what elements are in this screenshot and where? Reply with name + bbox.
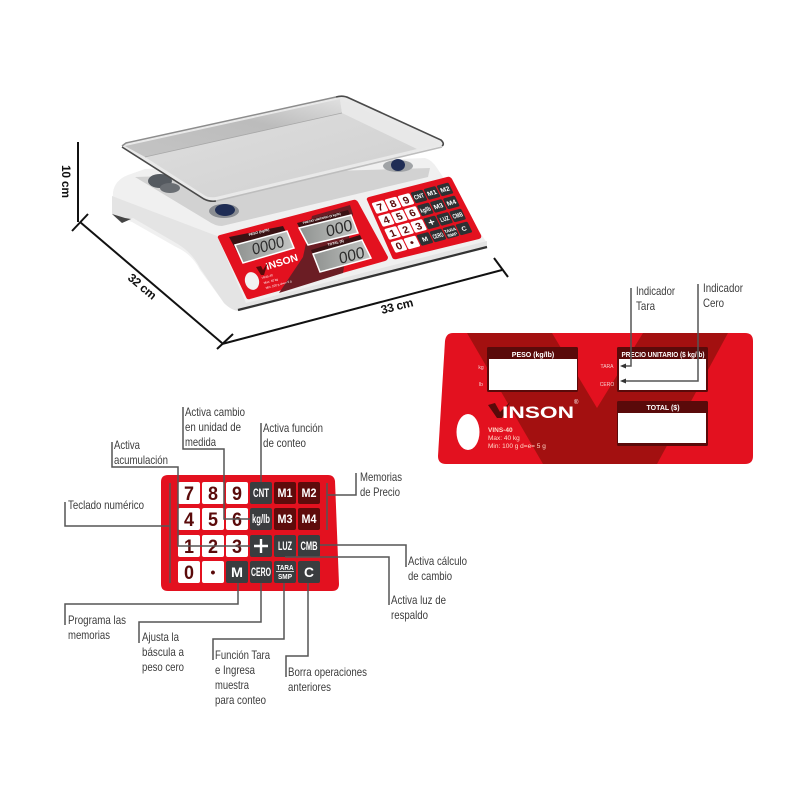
numeric keys: 1: [184, 537, 194, 558]
callout: indicador cero: [620, 281, 743, 384]
callout: ajusta a peso cero: peso cero: [142, 660, 184, 674]
Vinson logo: INSON: [502, 403, 574, 422]
Vinson logo: ®: [574, 399, 579, 406]
function keys: C: [304, 564, 314, 580]
window: total: TOTAL ($): [646, 405, 680, 412]
callout: ajusta a peso cero: [139, 583, 261, 674]
function keys: M: [231, 564, 243, 580]
callout: programa las memorias: [65, 583, 238, 642]
indicator labels: TARA: [601, 364, 614, 370]
dark V shape: [467, 333, 728, 464]
numeric keys: 7: [184, 484, 194, 505]
window: precio unitario: [617, 347, 708, 392]
callout: activa función de conteo: de conteo: [263, 436, 306, 450]
display panel on scale: 0000: [251, 233, 286, 259]
scale feet: [148, 159, 413, 218]
callout: memorias de precio: de Precio: [360, 485, 400, 499]
callout: teclado numérico: [65, 483, 170, 583]
window: precio unitario: PRECIO UNITARIO ($ kg/lb): [622, 352, 704, 359]
display panel on scale: TOTAL ($): [327, 239, 344, 247]
keypad on scale: M: [421, 236, 430, 244]
indicator labels: [478, 364, 614, 388]
keypad on scale: CNT: [413, 193, 426, 202]
callout: activa acumulación: [112, 438, 250, 546]
numeric keys: 6: [232, 510, 242, 531]
keypad on scale: CERO: [432, 232, 445, 241]
illustration: scale with dimensions: [59, 96, 508, 349]
callout: programa las memorias: Programa las: [68, 613, 126, 627]
memory keys: M3: [278, 512, 293, 526]
function keys: kg/lb: [252, 512, 270, 526]
keypad on scale: [367, 177, 481, 259]
keypad on scale: 6: [407, 207, 418, 220]
numeric keys: 5: [208, 510, 218, 531]
callout: borra operaciones: [286, 583, 367, 694]
window: peso: PESO (kg/lb): [512, 352, 554, 359]
callout: programa las memorias: memorias: [68, 628, 110, 642]
function keys: CERO: [251, 565, 271, 579]
numeric keys: 2: [208, 537, 218, 558]
keypad on scale: 9: [401, 195, 412, 207]
callout: memorias de precio: Memorias: [360, 470, 402, 484]
model specifications: Max: 40 kg: [488, 435, 520, 442]
display panel on scale: [218, 200, 388, 299]
numeric keys: 3: [232, 537, 242, 558]
panel: display faceplate: [438, 333, 753, 464]
keypad on scale: 5: [394, 211, 405, 223]
callout: activa cálculo de cambio: Activa cálculo: [408, 554, 467, 568]
callout: activa acumulación: Activa: [114, 438, 140, 452]
Vinson logo: [488, 399, 579, 422]
keypad on scale: SMP: [447, 231, 458, 238]
callout: activa cambio de unidad: Activa cambio: [185, 405, 245, 419]
function keys: TARA: [276, 565, 294, 572]
callout: borra operaciones: Borra operaciones: [288, 665, 367, 679]
function keys: [226, 482, 320, 583]
callout: activa acumulación: acumulación: [114, 453, 168, 467]
numeric keys: •: [211, 564, 216, 580]
dimension: 32 cm: 32 cm: [125, 271, 159, 303]
callout: ajusta a peso cero: báscula a: [142, 645, 184, 659]
model specifications: Min: 100 g d=e= 5 g: [488, 443, 546, 450]
dimension: 33 cm: 33 cm: [379, 295, 415, 317]
keypad on scale: TARA: [443, 226, 458, 234]
keypad on scale: 3: [414, 221, 425, 233]
keypad on scale: +: [426, 217, 437, 229]
keypad on scale: CMB: [452, 212, 464, 220]
keypad on scale: 8: [388, 198, 399, 210]
display panel on scale: Min: 100 g d=e= 5 g: [265, 279, 292, 290]
callout: activa cálculo de cambio: de cambio: [408, 569, 452, 583]
scale body: [112, 158, 487, 311]
function keys: CNT: [253, 486, 269, 500]
display panel on scale: VINS-40: [261, 273, 274, 280]
callout: activa función de conteo: Activa función: [263, 421, 323, 435]
display panel on scale: PESO (kg/lb): [248, 228, 270, 237]
callout: teclado numérico: Teclado numérico: [68, 498, 144, 512]
keypad on scale: 4: [381, 214, 392, 227]
dimension lines: [72, 142, 508, 349]
keypad on scale: kg/lb: [419, 206, 432, 215]
memory keys: M4: [302, 512, 317, 526]
callout: memorias de precio: [327, 470, 402, 530]
faceplate background: [438, 333, 753, 464]
panel: keypad: [161, 475, 339, 591]
indicator labels: CERO: [600, 382, 614, 388]
keypad on scale: 7: [375, 202, 386, 214]
memory keys: [274, 482, 320, 530]
numeric keys: [178, 482, 248, 584]
function keys: LUZ: [278, 539, 292, 553]
callout: activa luz de respaldo: respaldo: [391, 608, 428, 622]
callout: indicador tara: Tara: [636, 299, 655, 313]
window: total: [617, 401, 708, 446]
display panel on scale: 000: [325, 216, 354, 241]
callout: función tara: e Ingresa: [215, 663, 255, 677]
numeric keys: 9: [232, 484, 242, 505]
level window oval: [456, 414, 480, 450]
keypad on scale: •: [408, 237, 417, 249]
indicator labels: kg: [478, 365, 484, 371]
keypad on scale: 1: [388, 228, 399, 240]
callout: borra operaciones: anteriores: [288, 680, 331, 694]
callout: función tara: [213, 583, 284, 707]
dimension: 10 cm: 10 cm: [59, 165, 73, 198]
callout: indicador cero: Cero: [703, 296, 724, 310]
callout: función tara: muestra: [215, 678, 249, 692]
callout: activa cambio de unidad: medida: [185, 435, 216, 449]
keypad on scale: 0: [394, 240, 405, 253]
window: peso: [487, 347, 578, 392]
callout: activa cambio de unidad: [183, 405, 250, 519]
keypad on scale: 2: [401, 224, 412, 236]
keypad on scale: M3: [433, 202, 445, 211]
callout: indicador tara: Indicador: [636, 284, 675, 298]
model specifications: VINS-40: [488, 427, 513, 434]
callout: ajusta a peso cero: Ajusta la: [142, 630, 179, 644]
memory keys: M2: [302, 486, 317, 500]
callout: indicador cero: Indicador: [703, 281, 743, 295]
callout: función tara: Función Tara: [215, 648, 270, 662]
weighing tray: [122, 96, 443, 201]
keypad on scale: C: [461, 226, 468, 233]
callout: activa cambio de unidad: en unidad de: [185, 420, 241, 434]
keypad on scale: M2: [439, 186, 452, 194]
keypad on scale: M4: [446, 199, 458, 208]
callout: activa cálculo de cambio: [320, 545, 467, 583]
callout: activa función de conteo: [261, 421, 323, 482]
numeric keys: 8: [208, 484, 218, 505]
model specifications: [488, 427, 546, 450]
memory keys: M1: [278, 486, 293, 500]
keypad background: [161, 475, 339, 591]
numeric keys: 4: [184, 510, 194, 531]
callout: activa luz de respaldo: [285, 557, 446, 622]
numeric keys: 0: [184, 563, 194, 584]
callout: función tara: para conteo: [215, 693, 266, 707]
callout: activa luz de respaldo: Activa luz de: [391, 593, 446, 607]
indicator labels: lb: [479, 382, 483, 388]
keypad on scale: M1: [426, 189, 439, 198]
function keys: CMB: [300, 539, 318, 553]
display panel on scale: INSON: [265, 253, 299, 273]
display panel on scale: PRECIO UNITARIO ($ kg/lb): [302, 212, 341, 225]
function keys: SMP: [278, 574, 292, 581]
display panel on scale: Max: 40 kg: [263, 277, 279, 285]
display panel on scale: 000: [338, 243, 366, 268]
keypad on scale: LUZ: [439, 215, 451, 224]
callout: indicador tara: [620, 284, 675, 368]
